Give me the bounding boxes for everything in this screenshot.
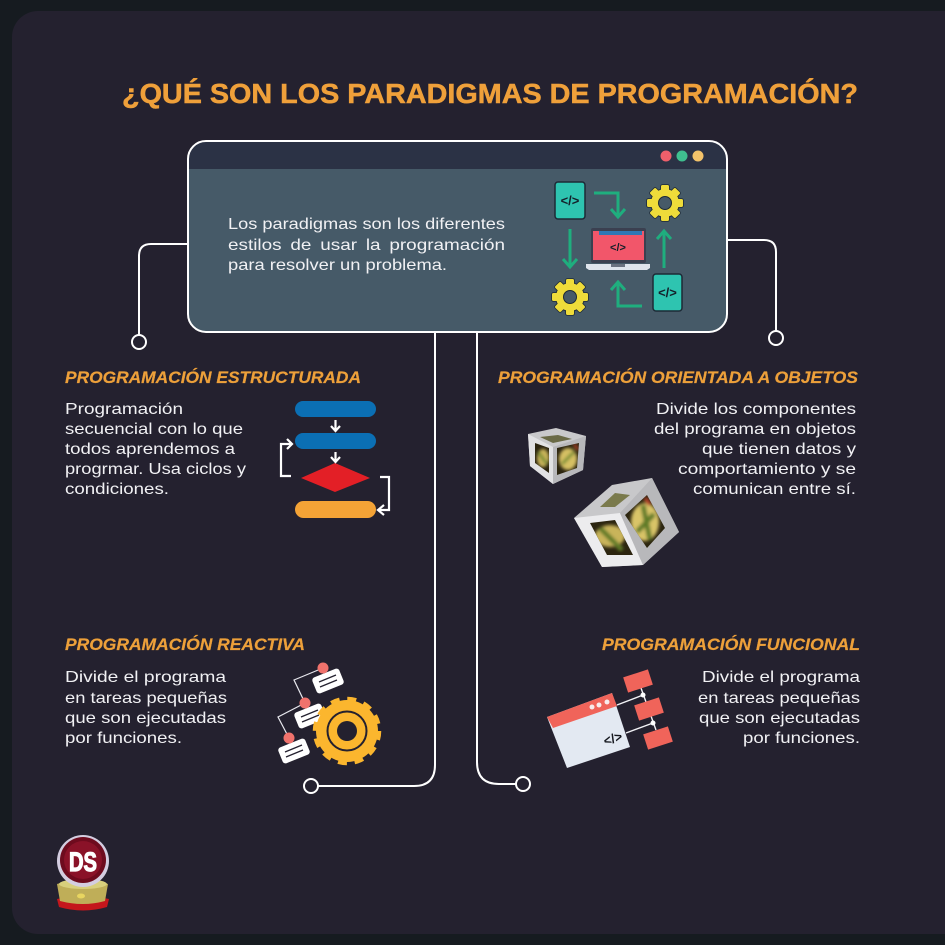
text block: Divide el programa xyxy=(702,669,860,686)
logo xyxy=(57,835,109,910)
icon: flowchart xyxy=(281,401,389,518)
connector: right xyxy=(727,240,783,345)
icon: code cycle around laptop: </> xyxy=(610,242,626,254)
text block: en tareas pequeñas xyxy=(698,690,860,707)
icon: small cube xyxy=(528,428,586,484)
heading: PROGRAMACIÓN ESTRUCTURADA xyxy=(65,368,361,387)
panel: intro window xyxy=(188,141,727,332)
icon: code cycle around laptop xyxy=(552,182,683,315)
icon: code window with linked blocks: </> xyxy=(602,728,624,749)
heading: PROGRAMACIÓN REACTIVA xyxy=(65,635,305,654)
text block: todos aprendemos a xyxy=(65,441,235,458)
text block xyxy=(698,669,860,747)
connector: centre left xyxy=(304,332,435,793)
text block: que son ejecutadas xyxy=(65,710,226,727)
panel: programación estructurada xyxy=(65,368,389,518)
icon: gear with task notes xyxy=(277,662,379,764)
text block: condiciones. xyxy=(65,481,169,498)
text block: comunican entre sí. xyxy=(693,481,856,498)
window buttons xyxy=(660,150,704,162)
heading: PROGRAMACIÓN FUNCIONAL xyxy=(602,635,860,654)
connector: centre right xyxy=(477,332,530,791)
icon: code cycle around laptop: </> xyxy=(561,193,580,208)
panel: programación reactiva xyxy=(65,635,379,764)
text block: Divide el programa xyxy=(65,669,226,686)
text block xyxy=(654,401,856,498)
text block: en tareas pequeñas xyxy=(65,690,227,707)
text block: que tienen datos y xyxy=(702,441,856,458)
text block: del programa en objetos xyxy=(654,421,856,438)
heading: PROGRAMACIÓN ORIENTADA A OBJETOS xyxy=(498,368,859,387)
panel: programación orientada a objetos xyxy=(498,368,859,567)
text block: secuencial con lo que xyxy=(65,421,243,438)
connector: left xyxy=(132,244,188,349)
text block xyxy=(65,401,246,498)
panel: programación funcional xyxy=(547,635,860,768)
intro text: Los paradigmas son los diferentes xyxy=(228,216,505,233)
text block: por funciones. xyxy=(65,730,182,747)
text block: por funciones. xyxy=(743,730,860,747)
logo: DS xyxy=(69,847,97,877)
intro text xyxy=(228,216,505,274)
text block: que son ejecutadas xyxy=(699,710,860,727)
intro text: para resolver un problema. xyxy=(228,257,447,274)
icon: large cube xyxy=(574,478,679,567)
icon: code cycle around laptop: </> xyxy=(658,285,677,300)
text block: Divide los componentes xyxy=(656,401,856,418)
text block: progrmar. Usa ciclos y xyxy=(65,461,246,478)
intro text: estilos de usar la programación xyxy=(228,237,505,254)
icon: code window with linked blocks xyxy=(547,669,673,768)
text block: comportamiento y se xyxy=(678,461,856,478)
title: ¿QUÉ SON LOS PARADIGMAS DE PROGRAMACIÓN? xyxy=(122,78,858,109)
text block: Programación xyxy=(65,401,183,418)
text block xyxy=(65,669,227,747)
